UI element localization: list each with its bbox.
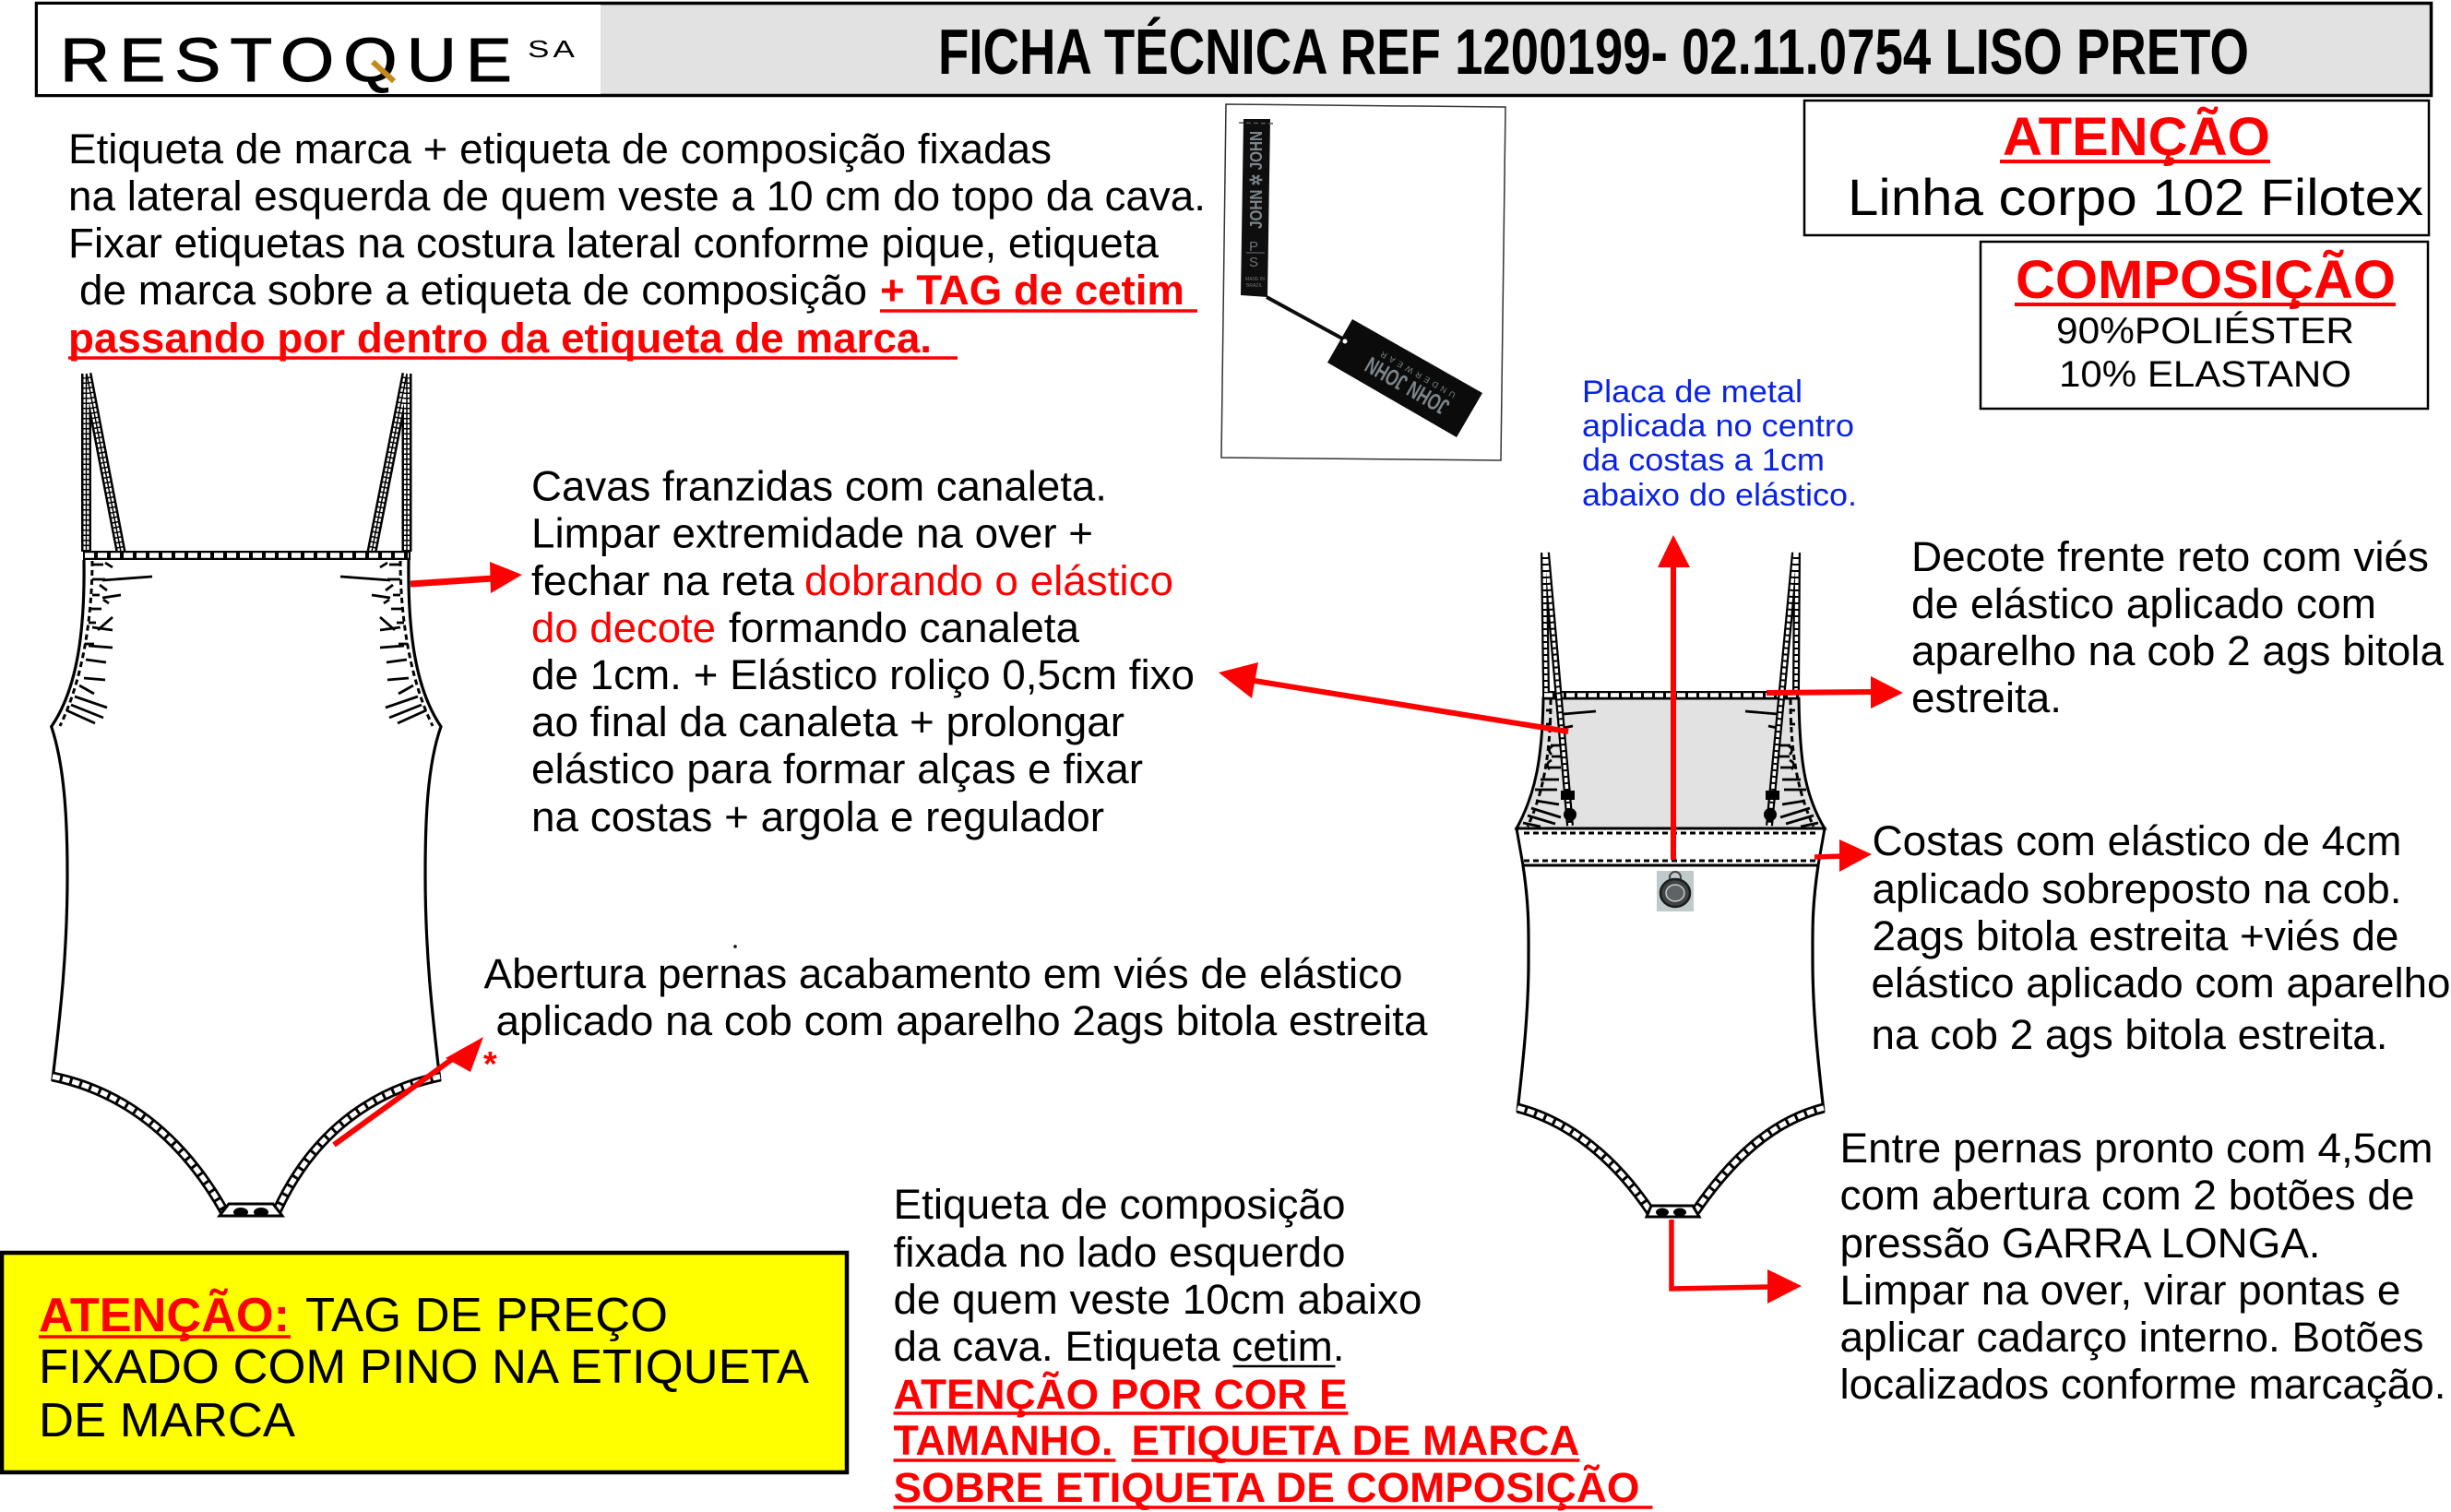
logo: Restoque SA: SA xyxy=(528,35,578,63)
panel: atenção linha: ATENÇÃO xyxy=(2003,107,2270,167)
strap regulators and rings xyxy=(1561,791,1779,821)
back straps xyxy=(1544,553,1797,826)
woven label xyxy=(1239,119,1276,297)
arrow: leg opening note xyxy=(334,1037,483,1145)
text block: front neckline: aparelho na cob 2 ags bitola xyxy=(1911,627,2445,674)
callout: yellow price tag warning xyxy=(2,1253,847,1472)
straps xyxy=(87,374,407,552)
arrow: crotch note xyxy=(1672,1220,1802,1304)
woven label: P xyxy=(1249,239,1258,255)
text block: back elastic: 2ags bitola estreita +viés de xyxy=(1873,912,2398,959)
text block: back elastic xyxy=(1871,817,2450,1058)
text block: armhole finishing: Limpar extremidade na over + xyxy=(531,509,1093,557)
technical drawing: front of bodysuit xyxy=(52,374,441,1217)
text block: brand and composition labels: Fixar etiquetas na costura lateral conforme pique, etiqueta xyxy=(68,220,1160,267)
crotch with snaps xyxy=(220,1204,282,1217)
arrow: back elastic note xyxy=(1814,839,1872,872)
text block: composition label placement: ETIQUETA DE MARCA xyxy=(1131,1417,1579,1464)
text block: crotch finishing: pressão GARRA LONGA. xyxy=(1839,1220,2321,1267)
text block: armhole finishing: elástico para formar alças e fixar xyxy=(531,745,1143,792)
text block: armhole finishing: dobrando o elástico xyxy=(804,557,1173,604)
text block: front neckline xyxy=(1911,533,2445,721)
callout: yellow price tag warning: FIXADO COM PINO NA ETIQUETA xyxy=(39,1340,809,1394)
text block: composition label placement: SOBRE ETIQUETA DE COMPOSIÇÃO xyxy=(893,1464,1640,1511)
text block: front neckline: de elástico aplicado com xyxy=(1911,580,2376,627)
text block: armhole finishing: de 1cm. + Elástico roliço 0,5cm fixo xyxy=(531,651,1195,698)
hang tag: UNDERWEAR xyxy=(1378,349,1458,399)
text block: composition label placement: de quem veste 10cm abaixo xyxy=(893,1276,1422,1323)
callout: yellow price tag warning: TAG DE PREÇO xyxy=(305,1289,668,1342)
neckline band xyxy=(83,551,410,560)
dot mark xyxy=(733,945,737,948)
back elastic band xyxy=(1517,828,1825,865)
woven label: MADE IN xyxy=(1245,277,1265,282)
text block: armhole finishing: do decote xyxy=(531,604,716,651)
text block: back elastic: Costas com elástico de 4cm xyxy=(1873,817,2402,864)
hang tag: JOHN JOHN xyxy=(1361,351,1454,420)
text block: brand and composition labels: + TAG de cetim xyxy=(880,267,1184,314)
arrow: strap to armhole note xyxy=(1219,662,1568,732)
text block: crotch finishing: localizados conforme marcação. xyxy=(1839,1361,2446,1408)
icon: metal plate xyxy=(1657,871,1694,911)
text block: armhole finishing xyxy=(531,463,1195,840)
photo: woven label and hang tag xyxy=(1221,104,1505,460)
text block: metal plate note xyxy=(1582,375,1857,513)
text block: front neckline: estreita. xyxy=(1911,674,2062,721)
text block: composition label placement: Etiqueta de composição xyxy=(893,1181,1345,1228)
text block: brand and composition labels: passando por dentro da etiqueta de marca. xyxy=(68,315,932,362)
text block: crotch finishing: Limpar na over, virar pontas e xyxy=(1839,1267,2400,1314)
panel: composição: 10% ELASTANO xyxy=(2059,354,2351,395)
arrow: up to metal plate note xyxy=(1658,535,1690,860)
text block: back elastic: aplicado sobreposto na cob. xyxy=(1873,865,2402,912)
neckline band xyxy=(1542,691,1799,699)
text block: crotch finishing: aplicar cadarço interno. Botões xyxy=(1839,1314,2424,1361)
logo: Restoque SA: RESTOQUE xyxy=(60,26,521,95)
asterisk: * xyxy=(483,1045,497,1084)
hang tag xyxy=(1327,319,1482,437)
text block: brand and composition labels xyxy=(68,125,1206,362)
text block: leg opening finishing: Abertura pernas acabamento em viés de elástico xyxy=(483,950,1402,997)
text block: back elastic: na cob 2 ags bitola estreita. xyxy=(1871,1011,2387,1058)
gray inner front panel xyxy=(1517,698,1825,828)
text block: metal plate note: abaixo do elástico. xyxy=(1582,478,1857,513)
text block: brand and composition labels: de marca sobre a etiqueta de composição xyxy=(79,267,867,314)
text block: composition label placement: da cava. Etiqueta cetim. xyxy=(893,1323,1345,1370)
text block: metal plate note: Placa de metal xyxy=(1582,375,1803,410)
text block: armhole finishing: formando canaleta xyxy=(729,604,1080,651)
arrow: neckline note xyxy=(1767,676,1903,708)
panel: composição: COMPOSIÇÃO xyxy=(2016,250,2396,310)
header bar xyxy=(37,4,2432,96)
text block: metal plate note: da costas a 1cm xyxy=(1582,443,1825,478)
woven label: JOHN ✲ JOHN xyxy=(1247,131,1266,229)
woven label: BRAZIL xyxy=(1246,283,1263,289)
crotch with snaps xyxy=(1647,1206,1699,1217)
text block: composition label placement xyxy=(893,1181,1653,1511)
panel: composição: 90%POLIÉSTER xyxy=(2056,310,2354,351)
text block: leg opening finishing xyxy=(483,950,1428,1044)
arrow: armhole note xyxy=(410,562,522,593)
panel: atenção linha xyxy=(1804,101,2429,235)
body outline xyxy=(1517,865,1824,1112)
technical drawing: back of bodysuit xyxy=(1517,553,1825,1217)
text block: armhole finishing: Cavas franzidas com canaleta. xyxy=(531,463,1107,509)
woven label: S xyxy=(1249,255,1258,270)
callout: yellow price tag warning: DE MARCA xyxy=(39,1394,295,1447)
leg openings xyxy=(53,1077,440,1211)
text block: metal plate note: aplicada no centro xyxy=(1582,409,1854,444)
text block: brand and composition labels: Etiqueta de marca + etiqueta de composição fixadas xyxy=(68,125,1052,173)
text block: composition label placement: ATENÇÃO POR COR E xyxy=(893,1371,1347,1418)
text block: leg opening finishing: aplicado na cob com aparelho 2ags bitola estreita xyxy=(496,997,1428,1044)
text block: crotch finishing xyxy=(1839,1125,2446,1408)
gathers xyxy=(60,561,433,726)
gathers xyxy=(1523,699,1818,827)
panel: composição xyxy=(1981,242,2428,409)
text block: composition label placement: TAMANHO. xyxy=(893,1417,1112,1464)
text block: back elastic: elástico aplicado com aparelho xyxy=(1871,959,2450,1006)
callout: yellow price tag warning: ATENÇÃO: xyxy=(39,1288,290,1342)
text block: armhole finishing: fechar na reta xyxy=(531,557,795,604)
text block: crotch finishing: com abertura com 2 botões de xyxy=(1839,1172,2415,1219)
text block: front neckline: Decote frente reto com viés xyxy=(1911,533,2429,580)
leg openings xyxy=(1517,1108,1824,1211)
text block: brand and composition labels: na lateral esquerda de quem veste a 10 cm do topo da cava. xyxy=(68,173,1206,220)
text block: composition label placement: fixada no lado esquerdo xyxy=(893,1229,1345,1276)
text block: crotch finishing: Entre pernas pronto com 4,5cm xyxy=(1839,1125,2433,1172)
text block: armhole finishing: ao final da canaleta + prolongar xyxy=(531,698,1124,745)
text block: armhole finishing: na costas + argola e regulador xyxy=(531,793,1104,840)
panel: atenção linha: Linha corpo 102 Filotex xyxy=(1848,168,2423,226)
